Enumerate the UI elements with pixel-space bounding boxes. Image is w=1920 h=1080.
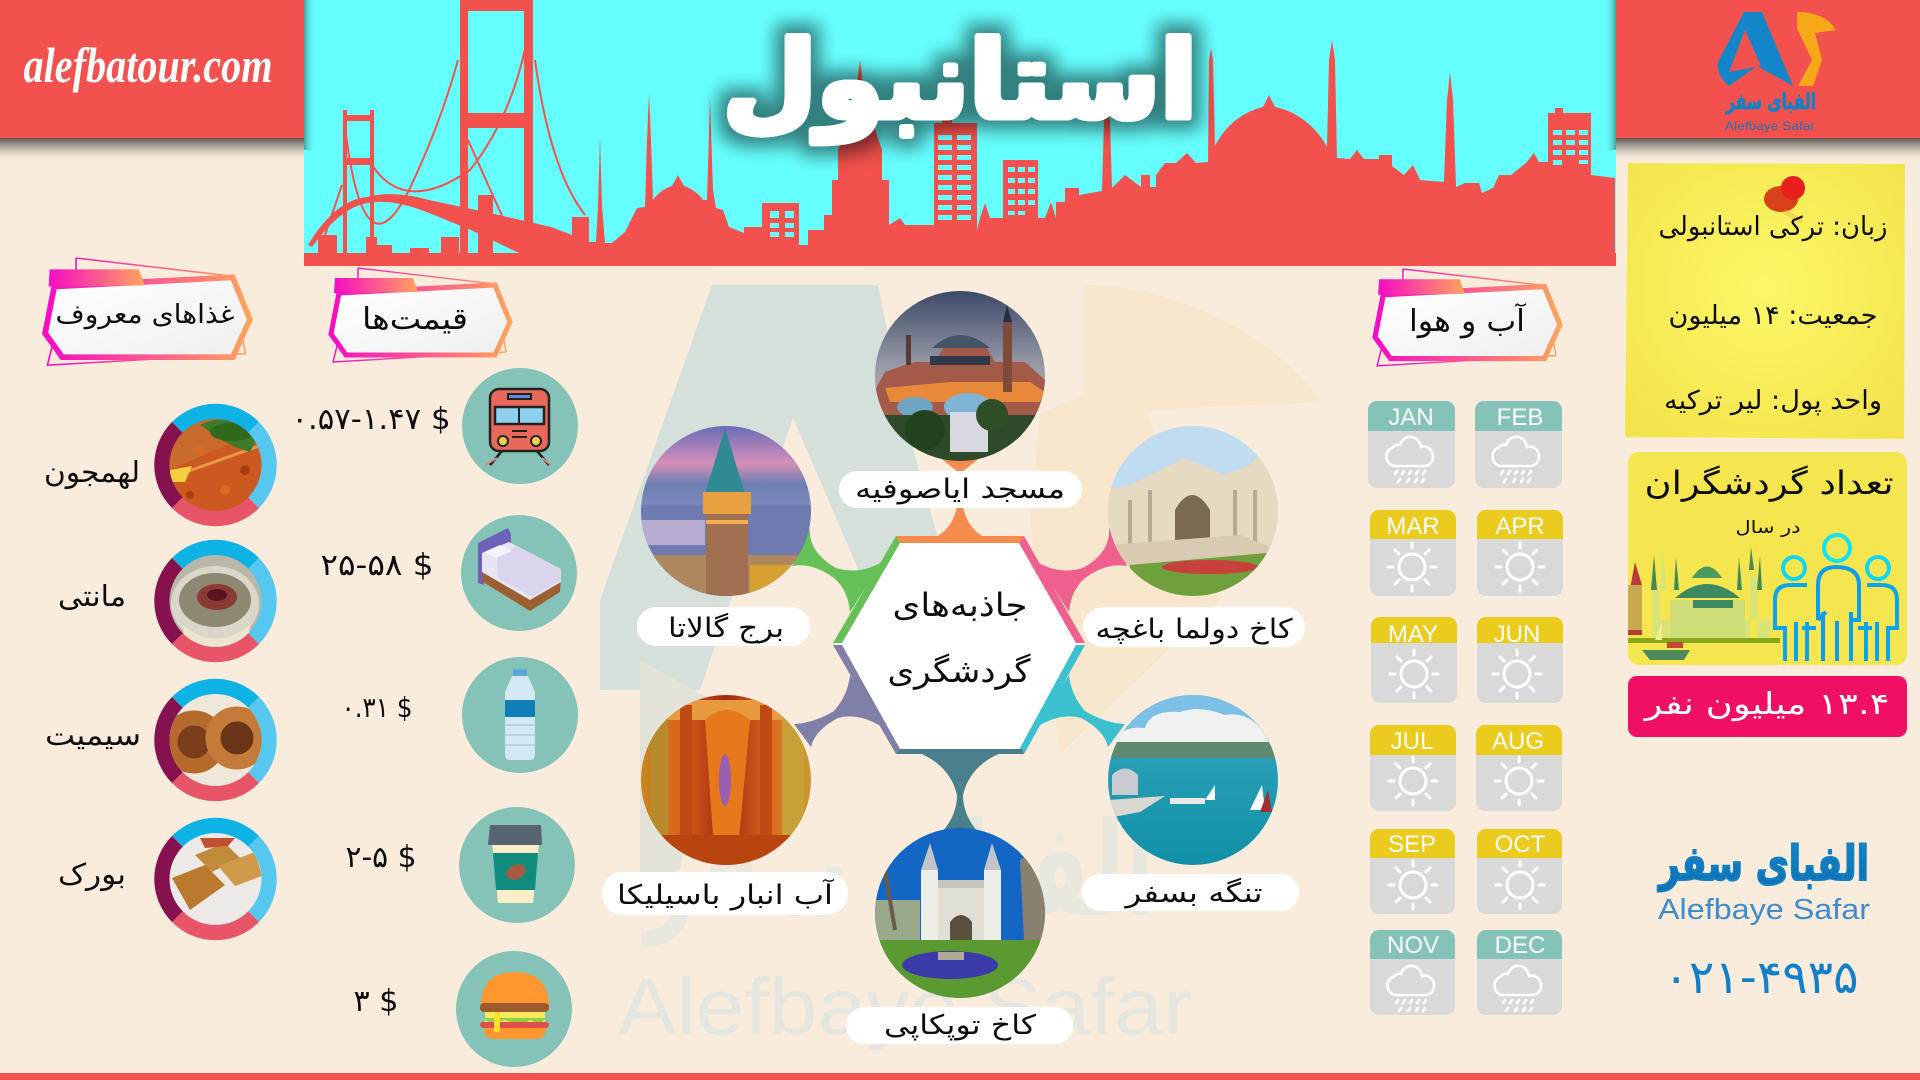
connector: top [930,456,990,540]
prices list [292,368,578,1067]
month: MAR: MAR [1386,513,1440,540]
website box [0,0,304,138]
pill: Bosphorus: تنگه بسفر [1123,877,1262,909]
photo: Hagia Sophia [875,291,1045,461]
badge: prices: قیمت‌ها [362,302,468,337]
food label: lahmacun: لهمجون [44,455,140,489]
price: coffee [459,807,575,923]
banner: Istanbul skyline [304,0,1616,266]
month: SEP [1370,829,1455,914]
photo: Dolmabahce Palace [1108,426,1278,596]
food label: borek: بورک [58,857,126,891]
pill: Galata Tower [637,607,810,646]
month: NOV: NOV [1387,932,1439,959]
month: AUG: AUG [1492,728,1544,755]
illustration: mosque [1628,547,1780,660]
logo box top right: الفبای سفر [1725,90,1816,115]
attractions mind map [602,291,1305,1044]
total tourists bar [1628,676,1907,737]
illustration: people [1775,535,1897,661]
watermark logo: الفبای سفر [641,794,1155,947]
month: AUG [1476,725,1562,811]
month: NOV [1370,930,1455,1015]
month: FEB [1475,401,1562,488]
month: FEB: FEB [1497,404,1543,431]
building windows [770,130,1588,237]
sticky note: facts: واحد پول: لیر ترکیه [1664,386,1882,416]
brand block: ۰۲۱-۴۹۳۵ [1664,950,1858,1004]
badge: weather [1375,269,1560,366]
title: Istanbul: استانبول [723,19,1197,143]
shadows of top boxes [0,0,1920,162]
icon: train [485,389,551,465]
food label: simit: سیمیت [45,718,141,752]
connector: upper left [792,528,882,612]
month: JUN: JUN [1494,621,1540,648]
icon: red pin [1764,176,1805,222]
month: JAN: JAN [1388,404,1434,431]
price: hotel [461,515,577,631]
central hexagon [833,536,1085,754]
pill: Bosphorus [1082,874,1299,911]
pill: Topkapi Palace: کاخ توپکاپی [884,1010,1036,1041]
foods list [44,404,277,940]
photo: Galata Tower [641,426,811,596]
photo: Bosphorus [1108,695,1278,865]
price: transport [462,368,578,484]
month: MAR [1370,510,1456,596]
pill: Basilica Cistern: آب انبار باسیلیکا [617,879,835,911]
price text: water: ۰.۳۱ $ [342,691,412,724]
pill: Hagia Sophia: مسجد ایاصوفیه [855,474,1065,505]
food label: manti: مانتی [58,579,126,613]
connector: lower right [1034,675,1125,747]
icon: burger [480,972,549,1039]
badge: famous foods: غذاهای معروف [56,300,234,330]
badge: famous foods [45,258,250,365]
connector: upper right [1037,528,1127,612]
tourists card [1628,452,1907,665]
pill: Topkapi Palace [846,1007,1073,1044]
month: DEC [1477,930,1562,1015]
weather calendar [1368,401,1563,1015]
pill: Basilica Cistern [602,872,848,915]
badge: weather: آب و هوا [1409,303,1527,339]
logo box top right [1616,0,1920,138]
pill: Galata Tower: برج گالاتا [668,612,784,644]
month: JUL: JUL [1391,728,1433,755]
connector: bottom [917,752,1003,832]
food: lahmacun [154,404,277,526]
pill: Dolmabahce Palace [1083,607,1305,647]
month: OCT [1477,829,1562,914]
month: DEC: DEC [1495,932,1545,959]
icon: water bottle [505,669,535,760]
logo box top right: Alefbaye Safar [1725,119,1815,133]
icon: bed [478,528,561,611]
price text: burger: ۳ $ [354,984,398,1019]
icon: logo mark [1718,12,1836,86]
icon: coffee cup [488,825,542,903]
bridge and city silhouette [304,0,1616,266]
watermark logo [600,285,1320,1051]
month: APR [1477,510,1563,596]
watermark logo: Alefbaye Safar [618,962,1192,1051]
price text: hotel: ۲۵-۵۸ $ [320,548,434,583]
connector: lower left [794,675,885,747]
bottom bar [0,1073,1920,1080]
central hexagon: گردشگری [888,652,1031,690]
month: OCT: OCT [1495,831,1546,858]
total tourists bar: ۱۳.۴ میلیون نفر [1642,687,1890,722]
brand block: Alefbaye Safar [1658,894,1870,926]
central hexagon: جاذبه‌های [892,586,1028,624]
website box: alefbatour.com [24,37,272,93]
month: MAY: MAY [1388,621,1438,648]
price: burger [456,951,572,1067]
month: APR: APR [1495,513,1545,540]
month: JUL [1370,725,1456,811]
pill: Hagia Sophia [839,471,1082,508]
month: JAN [1368,401,1455,488]
month: MAY [1371,617,1457,703]
price text: coffee: ۲-۵ $ [346,840,416,875]
month: JUN [1477,617,1563,703]
sticky note: facts: جمعیت: ۱۴ میلیون [1668,301,1878,331]
food: simit [154,679,277,801]
sticky note: facts [1625,163,1905,439]
photo: Topkapi Palace [875,828,1050,998]
sticky note: facts: زبان: ترکی استانبولی [1658,212,1888,242]
badge: prices [331,268,510,362]
pill: Dolmabahce Palace: کاخ دولما باغچه [1096,614,1293,645]
brand block [1657,836,1870,1004]
month: SEP: SEP [1388,831,1436,858]
tourists card: تعداد گردشگران [1644,464,1894,502]
food: borek [154,818,277,940]
price text: transport: ۰.۵۷-۱.۴۷ $ [292,402,450,437]
tourists card: در سال [1736,518,1800,538]
photo: Basilica Cistern [641,695,811,865]
price: water [462,657,578,773]
food: manti [154,540,277,662]
